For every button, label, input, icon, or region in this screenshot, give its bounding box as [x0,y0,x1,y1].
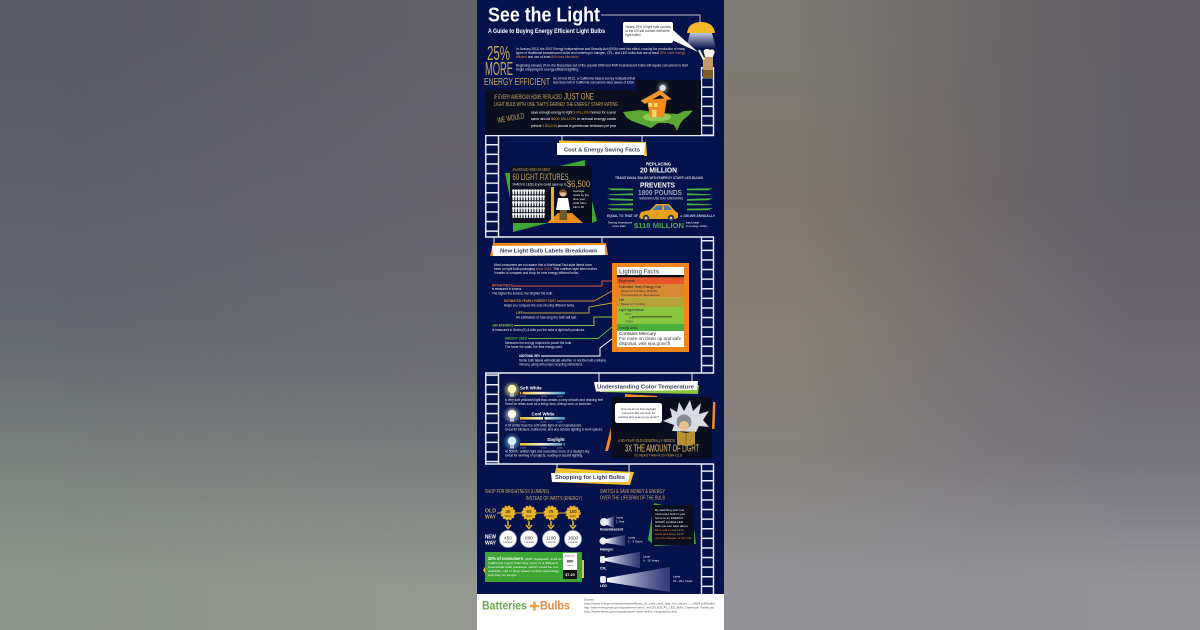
label explanations: is measured in Kelvin (K) & tells you the color a light bulb produces. [492,328,585,332]
panel: lighting facts label: 2700 K [625,320,633,324]
panel: 20 million bulbs: each year [686,220,699,224]
incandescent: Incandescent [600,528,624,532]
daylight: At 5000K, whitish light and resembles more of a daylight sky. [505,450,590,454]
switch and save headline [600,489,665,502]
icon: daylight bulb [505,435,519,449]
label explanations: ESTIMATED YEARLY ENERGY COST [504,299,556,303]
infographic panel [477,0,724,630]
panel: one bulb savings [485,80,701,135]
label explanations: Some bulb labels will indicate whether or not the bulb contains [519,358,606,362]
callout: consumer stat [483,552,584,582]
daylight: 3500K [541,447,547,449]
label explanations: An estimation of how long the bulb will last. [516,316,577,320]
chart: watts to lumens [485,506,582,548]
intro text: types of traditional incandescent bulbs and ushering in halogen, CFL, and LED bulbs that are at least 25% more energy [516,51,685,55]
icon: 60 bulbs grid [512,189,545,218]
subtitle: A Guide to Buying Energy Efficient Light Bulbs [488,28,605,35]
panel: lighting facts label [612,263,689,352]
panel: 60 light fixtures: 60 LIGHT FIXTURES [512,172,568,182]
callout: consumer stat: and stay for longer. [488,573,517,577]
green swooshes right [687,188,713,210]
footer logo: Batteries [482,598,527,612]
heading tab: new labels [490,243,608,256]
icon: US map [623,110,693,131]
callout: switching savings: home to an ENERGY [655,516,684,520]
icon: height bar and child [547,187,583,223]
switch and save headline: SWITCH & SAVE MONEY & ENERGY [600,489,665,495]
soft white: 5000K [557,396,563,398]
panel: lighting facts label: Lighting Facts [619,268,659,276]
LED: Lasts [673,574,681,578]
callout: switching savings: $8 a year in electricity [655,528,685,532]
panel: 60 light fixtures [505,160,597,232]
panel: 3x the light [605,394,716,458]
cool white: Great for kitchens, bathrooms, and any outdoor lighting & work spaces. [505,428,603,432]
800 lumens: Lumens [524,540,534,544]
soft white: 3500K [541,396,547,398]
incandescent: Lasts [616,516,624,520]
panel: 60 light fixtures: Average [573,189,584,193]
panel: lighting facts label: Contains Mercury [619,331,657,336]
halogen: 1 - 3 Years [628,540,643,544]
label explanations: ADDITIONAL INFO [519,354,540,358]
callout: consumer stat: 30% of consumers [488,556,523,561]
intro text [516,47,688,84]
panel: 60 light fixtures: time your [573,197,585,201]
60 watts: Watts [526,514,533,518]
cool white: Cool White [532,412,555,416]
panel: 3x the light: 3X THE AMOUNT OF LIGHT [625,444,699,454]
panel: 20 million bulbs: in energy costs [686,224,708,228]
callout: label connectors [513,281,612,356]
chart: watts to lumens: NEW [485,534,497,540]
panel: one bulb savings: WE WOULD [497,111,525,125]
callout: switching savings [648,503,696,546]
label explanations: is measured in lumens. [492,287,522,291]
heading tab: color temperature: Understanding Color Temperature [597,384,694,390]
100 watts: 100 [569,509,577,514]
heading tab: cost and energy [557,140,647,156]
chart: watts to lumens: OLD [485,508,496,514]
CFL [600,552,660,570]
40 watts: Watts [505,514,512,518]
heading tab: new labels: New Light Bulb Labels Breakdown [500,248,597,254]
intro text: Beginning January 2014, the final phase-out of the popular 60W and 40W incandescent bulbs will require consumers to start [516,64,688,68]
callout: switching savings: bulb you can save about [655,524,688,528]
label explanations: mercury, along with proper recycling instructions. [519,362,583,366]
panel: 20 million bulbs: EQUAL TO THAT OF [607,214,638,218]
footer logo: Bulbs [540,598,570,612]
sources: http://www.ehow.com/switch/save-more-bulbs-infographic.asp [584,610,678,614]
callout: switching savings: most-used bulb in your [655,512,685,516]
soft white: Great for areas such as a living room, dining room, or bedroom. [505,402,592,406]
1100 lumens: Lumens [546,540,556,544]
soft white: A very soft yellowish light that creates a very smooth and relaxing feel [505,398,603,402]
intro text: In January 2012, the 2007 Energy Independence and Security Act (EISA) went into effect, causing the production of many [516,47,685,51]
panel: 20 million bulbs: 1800 POUNDS [638,190,682,197]
daylight: 5000K [557,447,563,449]
panel: 20 million bulbs: $118 MILLION [634,221,684,230]
LED [600,567,693,592]
panel: lighting facts label: For more on clean up and safe [619,336,682,341]
450 lumens [500,530,516,548]
label explanations: Helps you compare the cost of using different bulbs. [504,304,575,308]
callout: consumer stat: (835 replaced, and in [525,557,561,561]
daylight [505,435,590,458]
panel: lighting facts label: Energy Used [619,326,638,330]
panel: 60 light fixtures: Switch to LEDs & you could save up to [512,182,567,186]
callout: switching savings: By switching your one [655,508,685,512]
shop headline: INSTEAD OF WATTS (ENERGY) [526,496,582,502]
headline: 25% more energy efficient: MORE [485,58,513,79]
1600 lumens [564,530,582,548]
panel: one bulb savings: prevent 9 BILLION pounds of greenhouse emissions per year [531,124,617,128]
panel: lighting facts label: Brightness [619,279,635,283]
75 watts: Watts [548,514,555,518]
panel: 60 light fixtures: child turns [573,201,587,205]
75 watts: 75 [549,509,554,514]
panel: lighting facts label: Warm [625,312,632,316]
panel: lighting facts label: Based on 3 hrs/day, 11¢/kWh [621,289,658,293]
callout: consumer stat: available, call or shop based on their technology [488,569,560,573]
mini label: 800 [567,558,574,564]
footer logo [482,598,570,612]
chart: watts to lumens: WAY [485,514,496,520]
panel: one bulb savings: IF EVERY AMERICAN HOME REPLACED [494,95,562,101]
callout: consumer stat: household bulb package, which could be not [488,565,558,569]
incandescent: 1 Year [616,520,625,524]
cool white: 2700K [520,421,526,423]
CFL: CFL [600,566,607,570]
callout: switching savings: costs and about $135 [655,532,684,536]
chart: bulb lifespans [599,516,693,592]
intro text: efficient and use at least 80% less electricity. [516,55,579,59]
label explanations: ENERGY USED [505,336,528,340]
callout bubble: Did you know that daylight [621,407,656,411]
callout bubble: colored bulbs are best for [622,411,655,415]
callout bubble: reading and seeing eye strain? [618,415,659,419]
icon: reader with light rays [663,400,709,446]
label explanations [492,284,606,366]
cool white: 5000K [557,421,563,423]
soft white: 2700K [520,396,526,398]
lamp cord [601,15,700,22]
headline: 25% more energy efficient: 25% [487,43,510,65]
800 lumens [520,530,538,548]
intro text: begin shopping for energy efficient lighting. [516,68,579,72]
chart: watts to lumens: WAY [485,540,496,546]
callout: switching savings: over the lifespan of the bulb. [655,536,693,540]
panel: 20 million bulbs [607,162,716,230]
panel: one bulb savings: LIGHT BULB WITH ONE THAT'S EARNED THE ENERGY STAR® RATING [494,101,618,108]
title: See the Light [488,4,600,26]
panel: 20 million bulbs: ● 150,000 ANNUALLY [680,214,716,218]
panel: 20 million bulbs: REPLACING [646,162,672,166]
panel: 20 million bulbs: Saving Americans [608,220,632,224]
switch and save headline: OVER THE LIFESPAN OF THE BULB [600,496,665,502]
heading tab: cost and energy: Cost & Energy Saving Facts [564,148,640,154]
speech bubble: Nearly 25% of light bulb sockets [626,25,671,29]
green swooshes left [607,188,633,210]
panel: lighting facts label: Light Appearance [619,308,644,312]
panel: 3x the light: TO READ THAN A 20-YEAR-OLD [634,453,682,458]
icon: house with bulb [641,83,672,122]
heading tab: color temperature [594,381,699,394]
sources: http://www.eia.gov/reports/eisa/effects_of_eisa_and_doe_lrb_report_-_1984.pdf/bulbs [584,602,716,606]
1600 lumens: Lumens [568,540,578,544]
labels intro text: Most consumers are not aware that a Nutritional Fact-style labels have [494,263,592,267]
ladder frame [485,67,714,594]
halogen: Halogen [600,548,613,552]
100 watts [566,506,580,528]
panel: 60 light fixtures: AN AVERAGE HOME HAS ABOUT [512,167,551,172]
panel: lighting facts label: Cost depends on rates and use [621,293,660,297]
icon: cool white bulb [505,408,519,422]
40 watts [502,506,514,528]
panel: 3x the light: A 60-YEAR-OLD GENERALLY NEEDS [618,438,675,443]
LED: 15 - 20+ Years [673,579,693,583]
label explanations: LIFE [516,311,523,315]
icon: person on ladder [699,49,715,78]
cool white [505,408,603,432]
icon: soft white bulb [505,383,519,397]
daylight: 2700K [520,447,526,449]
sources: http://www.energystar.gov/ia/partners/manuf_res/CFL/ESCFL_LED_Bulb_Challenge_Toolkit.pdf [584,606,714,610]
soft white: Soft White [520,386,542,390]
450 lumens: 450 [504,536,512,540]
panel: one bulb savings: save enough energy to light 3 MILLION homes for a year [531,110,617,114]
halogen [599,535,643,552]
shop headline [485,489,582,502]
label explanations: LIGHT APPEARANCE [492,324,513,328]
callout: switching savings: STAR® certified LED [655,520,684,524]
100 watts: Watts [570,514,577,518]
headline: 25% more energy efficient [484,43,550,88]
label explanations: The lower the watts, the less energy used. [505,345,563,349]
1100 lumens [542,530,560,548]
sources: Sources: [584,598,595,602]
soft white [505,383,603,406]
labels intro text [494,263,597,275]
cool white: 3500K [541,421,547,423]
LED: LED [600,584,607,588]
icon: hanging lamp [686,22,716,48]
panel: 20 million bulbs: TRADITIONAL BULBS WITH ENERGY STAR® LED BULBS [615,176,704,180]
heading tab: shopping: Shopping for Light Bulbs [555,475,625,481]
speech bubble [623,22,698,52]
label explanations: Measures the energy required to power the bulb. [505,341,572,345]
60 watts [522,506,536,528]
75 watts [544,506,558,528]
icon: orange car [639,204,678,221]
panel: lighting facts label: disposal, visit epa.gov/cfl [619,341,670,346]
callout: consumer stat: California regret that they were in a different [488,561,558,565]
panel: 20 million bulbs: PREVENTS [640,180,675,190]
mini label [563,553,577,579]
mini label: $7.20 [565,573,575,577]
CFL: 6 - 10 Years [643,558,660,562]
panel: 60 light fixtures: costs by the [573,193,589,197]
sources [584,598,716,614]
60 watts: 60 [527,509,532,514]
intro text: less than half of California consumers were aware of EISA. [553,80,635,84]
panel: one bulb savings: save about $600 MILLION in annual energy costs [531,117,616,121]
speech bubble: in the US still contain inefficient [626,29,670,33]
1100 lumens: 1100 [546,536,556,540]
callout bubble [615,403,662,423]
450 lumens: Lumens [503,540,513,544]
panel: 20 million bulbs: 20 MILLION [640,168,677,174]
panel: 60 light fixtures: $6,500 [567,179,590,189]
mini label: lumens [567,565,573,567]
label explanations: The higher the lumens, the brighter the bulb. [492,292,553,296]
halogen: Lasts [628,536,636,540]
labels intro text: been on light bulb packaging since 2012. This nutrition style label makes [494,267,597,271]
1600 lumens: 1600 [568,536,579,540]
daylight: Daylight [547,437,565,442]
cool white: A bit whiter than the soft white light of an incandescent. [505,424,582,428]
panel: lighting facts label: Tan [629,316,634,320]
shop headline: SHOP FOR BRIGHTNESS (LUMENS) [485,489,549,495]
panel: one bulb savings: JUST ONE [564,92,594,102]
40 watts: 40 [506,509,511,514]
CFL: Lasts [643,554,651,558]
panel: lighting facts label: Estimated Yearly Energy Cost [619,285,661,289]
panel: lighting facts label: Life [619,298,624,302]
heading tab: shopping [551,468,634,485]
incandescent [600,516,625,532]
800 lumens: 800 [525,536,533,540]
label explanations: BRIGHTNESS [492,284,513,288]
mini label: Brightness [565,554,576,558]
labels intro text: it easier to compare and shop for new energy efficient bulbs. [494,271,579,275]
panel: 20 million bulbs: GREENHOUSE GAS EMISSIONS [639,196,683,200]
panel: 20 million bulbs: more than [612,224,626,228]
speech bubble: light bulbs! [626,33,641,37]
daylight: Great for working on projects, reading or accent lighting. [505,454,583,458]
headline: 25% more energy efficient: ENERGY EFFICIENT [484,76,550,88]
panel: lighting facts label: Based on 3 hrs/day [621,302,646,306]
intro text: As of mid 2012, a California-based survey indicated that [553,76,635,80]
panel: 60 light fixtures: turns 18 [573,205,584,209]
